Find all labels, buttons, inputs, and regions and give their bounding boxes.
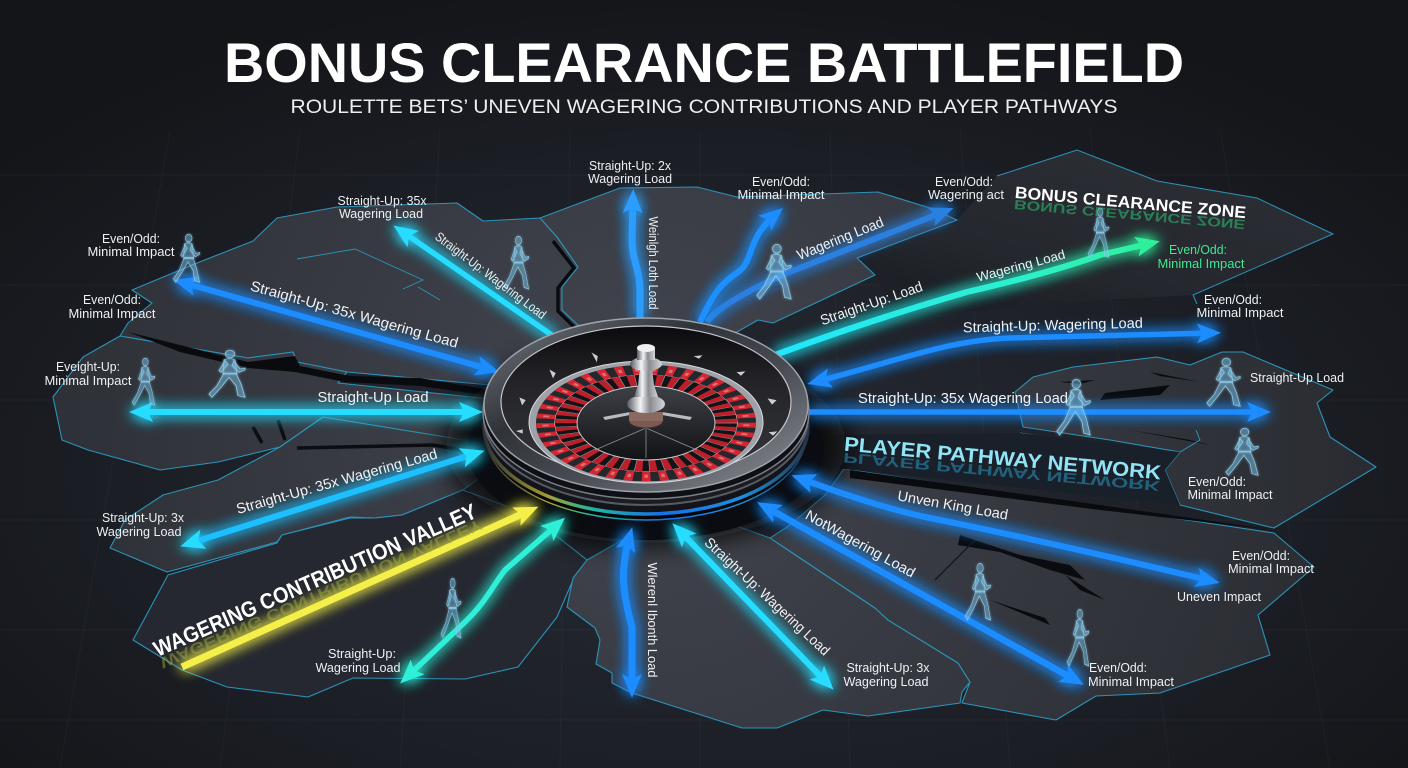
label: bottom vertical load: Wlerenl Ibonth Load xyxy=(645,562,660,678)
label: straight-up wagering south-east: Straight-Up: Wagering Load xyxy=(701,535,833,659)
callout: straight-up valley: Straight-Up: xyxy=(328,646,396,661)
callout: even/odd top: Even/Odd: xyxy=(752,174,810,189)
callout: straight-up 3x bottom xyxy=(844,660,930,689)
callout: even/odd top-left: Minimal Impact xyxy=(88,244,175,259)
cone spokes xyxy=(595,428,697,458)
callout: straight-up 3x left: Wagering Load xyxy=(96,524,182,539)
region: lower-left plateau xyxy=(110,417,495,572)
callout: even/odd far right xyxy=(1188,474,1273,502)
figure: lower right hiker xyxy=(1067,609,1089,666)
callout: even/odd left: Minimal Impact xyxy=(68,306,156,321)
figure: far right lower runner xyxy=(1226,428,1258,475)
callout: even/odd left: Even/Odd: xyxy=(83,292,141,307)
arrow: straight-up 35x east xyxy=(808,409,1263,415)
callout: straight-up 3x bottom: Wagering Load xyxy=(844,674,928,689)
callout: even/odd bottom right: Even/Odd: xyxy=(1089,660,1147,675)
callout: straight-up 35x top-left xyxy=(338,193,427,221)
figure: top centre walker xyxy=(757,244,791,299)
callout: even/odd right: Even/Odd: xyxy=(1204,292,1262,307)
spindle xyxy=(603,344,692,428)
callout: even/odd bottom right: Minimal Impact xyxy=(1088,674,1174,689)
callout: even/odd wagering act: Wagering act xyxy=(928,187,1004,202)
wheel base layers xyxy=(483,325,809,520)
region: top-left plateau xyxy=(120,203,578,385)
figure: right walker on arrow xyxy=(1057,379,1090,435)
callout: even/odd far right: Even/Odd: xyxy=(1188,474,1246,489)
arrow: top curved blue xyxy=(700,213,777,322)
callout: eveight-up left: Eveight-Up: xyxy=(56,359,120,374)
figure: upper centre-left walker xyxy=(504,236,529,289)
region: wagering contribution valley xyxy=(133,490,587,697)
label: straight-up load north-east: Straight-Up: Load xyxy=(819,279,925,329)
zone heading: bonus clearance zone: BONUS CLEARANCE ZONE xyxy=(1013,196,1246,232)
callout: even/odd far right: Minimal Impact xyxy=(1188,487,1273,502)
arrow: straight-up wagering north-west xyxy=(400,230,556,338)
callout: even/odd right: Minimal Impact xyxy=(1196,305,1284,320)
callout: even/odd top-left xyxy=(88,231,175,259)
silver track ring xyxy=(529,361,763,483)
label: top vertical load: Weinlgh Loth Load xyxy=(646,216,661,310)
callout: straight-up load right: Straight-Up Load xyxy=(1250,370,1344,385)
label: wagering load top right: Wagering Load xyxy=(795,215,886,264)
callout: even/odd bonus zone xyxy=(1158,242,1245,271)
region: bottom centre plateau xyxy=(567,520,970,728)
label: straight-up 35x wagering load north-west: Straight-Up: 35x Wagering Load xyxy=(248,279,460,352)
callout: even/odd top-left: Even/Odd: xyxy=(102,231,160,246)
callout: even/odd right xyxy=(1196,292,1284,320)
wheel bowl xyxy=(501,326,791,478)
arrow: straight-up south-east xyxy=(678,529,828,684)
arrow: straight-up 35x north-west xyxy=(181,282,492,370)
player figures xyxy=(132,208,1258,666)
roulette wheel xyxy=(483,318,809,520)
callout: even/odd bottom right xyxy=(1088,660,1174,689)
arrow: teal south-west xyxy=(406,523,559,678)
zone heading: wagering contribution valley: WAGERING CONTRIBUTION VALLEY xyxy=(150,498,481,662)
arrow: wagering contribution yellow xyxy=(182,510,531,667)
region: top centre plateau xyxy=(540,187,957,332)
figure: top left walker xyxy=(173,234,200,282)
title: BONUS CLEARANCE BATTLEFIELD xyxy=(224,31,1184,94)
callout: even/odd lower right: Even/Odd: xyxy=(1232,548,1290,563)
central cone xyxy=(577,386,715,460)
callout: straight-up 35x top-left: Straight-Up: 35x xyxy=(338,193,427,208)
figure: bonus zone walker xyxy=(1088,208,1109,257)
label: straight-up 35x east: Straight-Up: 35x Wagering Load xyxy=(858,391,1068,407)
figure: far right runner xyxy=(1207,358,1240,406)
region: bottom-right plateau xyxy=(770,469,1314,720)
terrain cracks xyxy=(128,241,1290,625)
label: straight-up wagering load diagonal: Straight-Up: Wagering Load xyxy=(432,229,549,322)
label: straight-up 35x south-west: Straight-Up: 35x Wagering Load xyxy=(235,446,439,518)
callout: even/odd bonus zone: Minimal Impact xyxy=(1158,256,1245,271)
arrow: straight-up 35x south-west xyxy=(188,453,477,544)
endpoint callouts xyxy=(44,158,1344,689)
zone heading: wagering contribution valley: WAGERING CONTRIBUTION VALLEY xyxy=(157,515,485,671)
callout: even/odd top: Minimal Impact xyxy=(738,187,825,202)
callout: straight-up 2x top: Straight-Up: 2x xyxy=(589,158,671,173)
callout: uneven impact: Uneven Impact xyxy=(1177,589,1261,604)
arrow: uneven load east-south-east xyxy=(799,478,1212,581)
subtitle: ROULETTE BETS’ UNEVEN WAGERING CONTRIBUTIONS AND PLAYER PATHWAYS xyxy=(290,96,1118,118)
pocket ring xyxy=(566,381,726,465)
label: wagering load green arrow: Wagering Load xyxy=(975,247,1067,285)
label: straight-up load west: Straight-Up Load xyxy=(318,390,428,406)
arrow: straight-up load west xyxy=(137,409,475,415)
figure: valley walker xyxy=(441,578,461,638)
callout: straight-up 35x top-left: Wagering Load xyxy=(339,206,423,221)
label: straight-up wagering load east: Straight-Up: Wagering Load xyxy=(963,316,1143,336)
number ring xyxy=(546,370,746,476)
bowl studs xyxy=(515,352,778,436)
callout: straight-up 2x top: Wagering Load xyxy=(588,171,672,186)
callout: straight-up 3x left xyxy=(96,510,184,539)
callout: straight-up 3x left: Straight-Up: 3x xyxy=(102,510,184,525)
callout: even/odd lower right: Minimal Impact xyxy=(1228,561,1314,576)
zone heading: player pathway network: PLAYER PATHWAY NETWORK xyxy=(842,449,1161,494)
band behind player pathway network xyxy=(800,433,1180,505)
figure: far left walker xyxy=(132,358,155,405)
arrow labels xyxy=(235,215,1143,677)
callout: even/odd wagering act: Even/Odd: xyxy=(935,174,993,189)
pathway arrows xyxy=(137,197,1263,690)
callout: even/odd lower right xyxy=(1228,548,1314,576)
figure: lower right walker xyxy=(965,563,991,620)
arrow: bottom vertical xyxy=(623,535,632,690)
figure: left walker xyxy=(209,350,245,397)
arrow: bonus zone green xyxy=(775,243,1152,355)
region: bonus clearance zone xyxy=(857,150,1333,318)
label: uneven king load: Unven King Load xyxy=(896,488,1009,524)
arrow: top vertical xyxy=(632,197,640,318)
wheel shadow xyxy=(446,347,846,543)
callout: eveight-up left: Minimal Impact xyxy=(44,373,132,388)
callout: straight-up valley xyxy=(316,646,400,675)
callout: even/odd wagering act xyxy=(928,174,1004,202)
zone heading: bonus clearance zone: BONUS CLEARANCE ZONE xyxy=(1014,184,1247,222)
zone heading: player pathway network: PLAYER PATHWAY NETWORK xyxy=(843,434,1162,484)
wheel outer rim xyxy=(484,318,808,492)
region: right plateau xyxy=(1015,352,1376,528)
callout: straight-up 2x top xyxy=(588,158,672,186)
callout: eveight-up left xyxy=(44,359,132,388)
region: left plateau xyxy=(53,336,500,470)
callout: even/odd top xyxy=(738,174,825,202)
callout: even/odd left xyxy=(68,292,156,321)
arrow: top right dark blue xyxy=(707,211,946,322)
callout: even/odd bonus zone: Even/Odd: xyxy=(1169,242,1227,257)
callout: straight-up 3x bottom: Straight-Up: 3x xyxy=(846,660,930,675)
arrow: straight-up wagering east xyxy=(815,333,1213,382)
label: not-wagering load: NotWagering Load xyxy=(802,508,918,581)
map terrain xyxy=(53,150,1376,728)
arrow: wagering south-east xyxy=(764,506,1077,681)
callout: straight-up valley: Wagering Load xyxy=(316,660,400,675)
